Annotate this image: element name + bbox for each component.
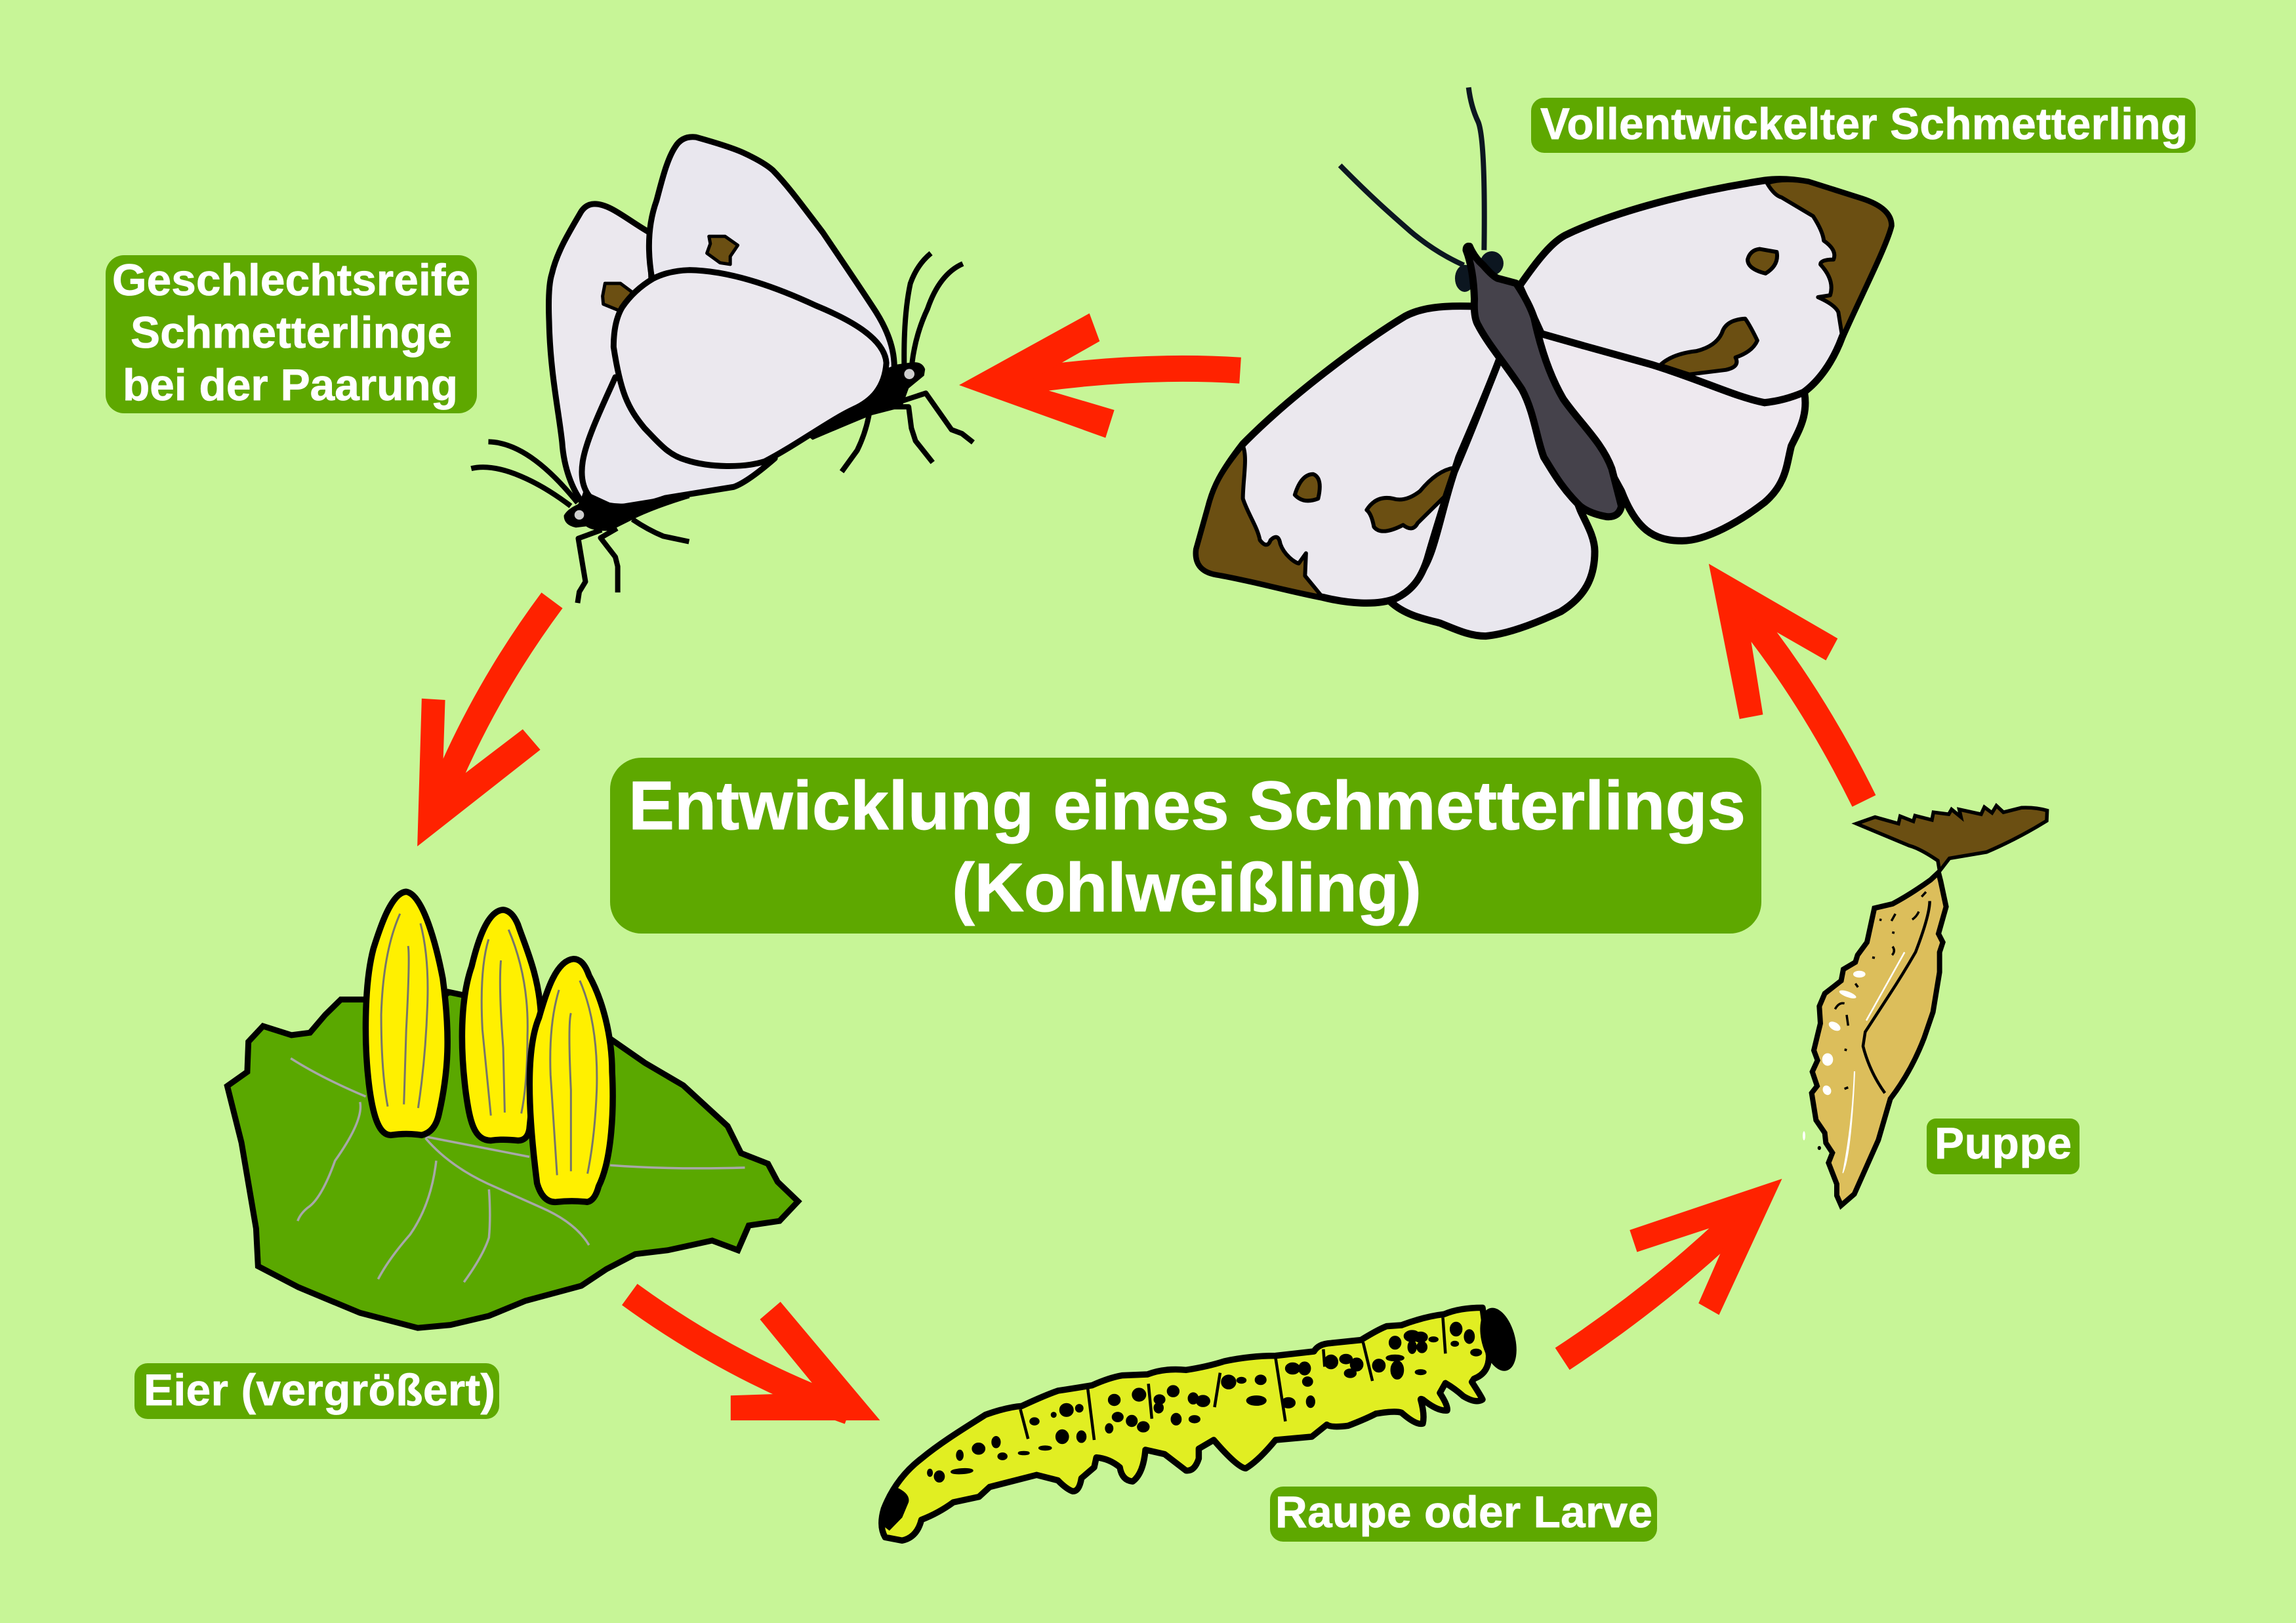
body [1466, 246, 1622, 517]
head [1475, 1307, 1522, 1372]
egg 1 [365, 892, 447, 1135]
black spots [928, 1323, 1481, 1482]
antennae and legs [471, 253, 973, 603]
eyes [575, 369, 914, 520]
title: Entwicklung eines Schmetterlings [628, 768, 1746, 844]
label: eggs: Eier (vergrößert) [144, 1366, 495, 1415]
illustration: adult butterfly [1197, 87, 1891, 636]
illustration: mating butterflies [471, 137, 973, 603]
egg 3 [529, 959, 613, 1202]
arrow: mating to eggs [417, 600, 552, 846]
segment lines [1020, 1317, 1445, 1440]
illustration: caterpillar [881, 1307, 1522, 1540]
title [610, 758, 1761, 934]
illustration: eggs on leaf [227, 892, 798, 1328]
antennae [1340, 87, 1485, 265]
label: mating butterflies: Schmetterlinge [131, 308, 452, 358]
title: (Kohlweißling) [952, 850, 1422, 926]
arrow: pupa to butterfly [1709, 564, 1864, 801]
label: mating butterflies: Geschlechtsreife [112, 256, 470, 305]
leaf veins [291, 1058, 745, 1282]
small black speck [1818, 1146, 1821, 1150]
label: caterpillar: Raupe oder Larve [1275, 1488, 1652, 1537]
right butterfly body [806, 362, 925, 440]
back left wing [549, 204, 651, 503]
left butterfly body [564, 493, 689, 531]
arrow: butterfly to mating [959, 314, 1240, 438]
back right wing [649, 137, 894, 404]
left wing spot [603, 283, 632, 310]
twig [1856, 806, 2047, 871]
left hindwing [1391, 356, 1595, 636]
leaf [227, 992, 798, 1328]
lower wing [582, 377, 775, 508]
caterpillar body [882, 1307, 1489, 1540]
right wing spot [707, 236, 738, 264]
eyes [1455, 251, 1504, 292]
dark marks [1835, 892, 1926, 1089]
left forewing [1197, 306, 1500, 603]
front wing [613, 270, 886, 466]
label: pupa: Puppe [1935, 1119, 2072, 1168]
egg 2 [462, 910, 541, 1141]
illustration: pupa [1803, 806, 2047, 1206]
wing case line [1863, 901, 1930, 1093]
right forewing [1519, 180, 1891, 403]
pupa body [1812, 873, 1946, 1206]
tail [881, 1487, 909, 1531]
label: mating butterflies: bei der Paarung [123, 361, 458, 410]
brown wing markings [1197, 180, 1891, 596]
right hindwing [1536, 334, 1805, 541]
white highlights [1803, 953, 1904, 1173]
label: fully developed butterfly: Vollentwickelter Schmetterling [1540, 100, 2188, 149]
label: mating butterflies [106, 255, 477, 413]
arrow: caterpillar to pupa [1563, 1179, 1782, 1359]
arrow: eggs to caterpillar [630, 1294, 880, 1420]
